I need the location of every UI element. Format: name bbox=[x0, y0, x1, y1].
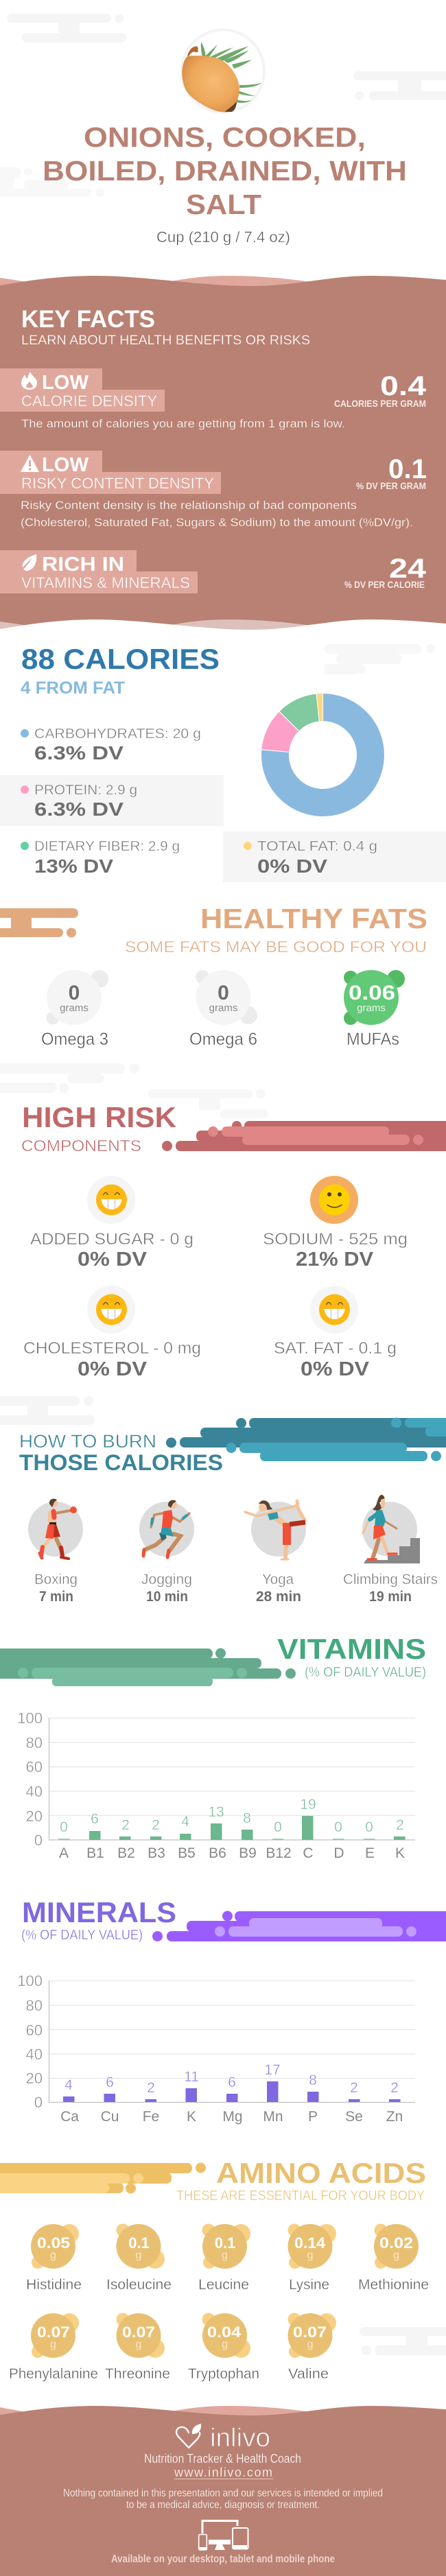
title: SALT bbox=[186, 189, 261, 220]
risk: saturated fat: SAT. FAT - 0.1 g bbox=[274, 1339, 397, 1358]
background cloud: calories bbox=[325, 644, 435, 674]
bar values: 17 bbox=[264, 2062, 281, 2078]
bar values: 2 bbox=[390, 2080, 399, 2096]
bar values: 0 bbox=[334, 1819, 342, 1835]
logo: inlivo: inlivo bbox=[210, 2424, 270, 2453]
icon: runner bbox=[143, 1513, 189, 1557]
fact: calorie density: The amount of calories you are getting from 1 gram is low. bbox=[21, 417, 345, 430]
banner: minerals bbox=[152, 1911, 446, 1941]
amino acid: tryptophan: g bbox=[222, 2339, 228, 2350]
amino acid: valine bbox=[288, 2313, 336, 2382]
x axis labels: P bbox=[308, 2109, 318, 2125]
activity: jogging: 10 min bbox=[146, 1589, 188, 1605]
heading: high risk: HIGH RISK bbox=[22, 1101, 176, 1133]
amino acid: histidine: Histidine bbox=[26, 2277, 82, 2293]
x axis labels: E bbox=[365, 1845, 375, 1861]
bar chart: minerals bbox=[17, 1972, 415, 2125]
icon: leaf bbox=[23, 554, 36, 571]
fact: calorie density: CALORIE DENSITY bbox=[21, 392, 157, 410]
y axis labels: 40 bbox=[26, 1783, 43, 1800]
amino acid: isoleucine: g bbox=[136, 2249, 141, 2261]
donut chart bbox=[261, 693, 384, 816]
bar values: 6 bbox=[91, 1811, 99, 1827]
bar chart: vitamins bbox=[17, 1710, 415, 1861]
fat: mufas: MUFAs bbox=[347, 1030, 399, 1049]
x axis labels: D bbox=[333, 1845, 344, 1861]
legend: protein bbox=[0, 775, 224, 826]
risk: cholesterol: 0% DV bbox=[78, 1358, 148, 1380]
activity: yoga: Yoga bbox=[262, 1572, 294, 1587]
amino acid: threonine: Threonine bbox=[105, 2366, 170, 2382]
serving size: Cup (210 g / 7.4 oz) bbox=[156, 228, 290, 246]
bars bbox=[58, 1816, 405, 1840]
x axis labels: Mn bbox=[263, 2109, 283, 2125]
banner: amino acids bbox=[0, 2162, 206, 2194]
amino acid: methionine: Methionine bbox=[358, 2277, 429, 2293]
fact: calorie density: 0.4 bbox=[380, 371, 427, 401]
x axis labels: B6 bbox=[209, 1845, 226, 1861]
title: ONIONS, COOKED, bbox=[84, 121, 366, 153]
legend: dietary fiber bbox=[21, 839, 180, 877]
heading: healthy fats: HEALTHY FATS bbox=[200, 903, 427, 934]
bar values: 2 bbox=[152, 1817, 160, 1833]
icon: smiling face bbox=[319, 1184, 350, 1216]
bar values bbox=[60, 1797, 404, 1835]
bar values: 2 bbox=[147, 2080, 155, 2096]
amino acid: valine: 0.07 bbox=[293, 2324, 327, 2341]
bar values: 13 bbox=[208, 1804, 224, 1820]
amino acid: threonine bbox=[105, 2313, 170, 2382]
amino acid: lysine: Lysine bbox=[289, 2277, 329, 2293]
legend: total fat bbox=[223, 831, 446, 882]
icon: stairs bbox=[364, 1538, 420, 1563]
icon: yoga pose bbox=[245, 1501, 305, 1559]
bar values: 2 bbox=[121, 1817, 130, 1833]
activity: climbing stairs bbox=[343, 1495, 438, 1605]
amino acid: isoleucine: 0.1 bbox=[128, 2234, 150, 2252]
subheading: minerals: (% OF DAILY VALUE) bbox=[21, 1928, 143, 1943]
legend: dietary fiber: DIETARY FIBER: 2.9 g bbox=[34, 839, 180, 854]
fat: mufas bbox=[344, 970, 405, 1049]
bar values: 6 bbox=[228, 2075, 236, 2090]
amino acid: tryptophan: Tryptophan bbox=[188, 2366, 259, 2382]
x axis labels bbox=[60, 2109, 403, 2125]
risk: sodium: SODIUM - 525 mg bbox=[263, 1230, 408, 1249]
fact: rich in vitamins and minerals bbox=[0, 550, 427, 593]
amino acid: methionine: g bbox=[393, 2249, 399, 2261]
x axis labels: Mg bbox=[222, 2109, 243, 2125]
y axis labels bbox=[17, 1710, 43, 1849]
fat: omega 6 bbox=[189, 970, 257, 1049]
disclaimer bbox=[63, 2488, 383, 2511]
activity: boxing: Boxing bbox=[34, 1572, 78, 1587]
x axis labels: B1 bbox=[86, 1845, 104, 1861]
activity: boxing: 7 min bbox=[39, 1589, 73, 1605]
heading: how to burn those calories: THOSE CALORIES bbox=[19, 1450, 223, 1475]
icon: devices bbox=[199, 2520, 248, 2550]
subheading: LEARN ABOUT HEALTH BENEFITS OR RISKS bbox=[21, 333, 310, 348]
amino acid: leucine: g bbox=[222, 2249, 228, 2261]
amino acid: histidine bbox=[26, 2224, 82, 2293]
fact: risky content density: (Cholesterol, Saturated Fat, Sugars & Sodium) to the amount (%DV/gr). bbox=[21, 516, 413, 529]
fat: omega 3: Omega 3 bbox=[41, 1030, 108, 1049]
fact: calorie density bbox=[0, 368, 427, 430]
legend: dietary fiber: 13% DV bbox=[34, 855, 113, 877]
icon: grinning face bbox=[96, 1294, 127, 1325]
x axis labels bbox=[59, 1845, 405, 1861]
panel: footer bbox=[0, 2406, 446, 2576]
activity: climbing stairs: Climbing Stairs bbox=[343, 1572, 438, 1587]
bar values: 19 bbox=[300, 1797, 316, 1812]
heading: how to burn those calories: HOW TO BURN bbox=[19, 1431, 156, 1452]
fact: risky content density: Risky Content density is the relationship of bad components bbox=[21, 499, 357, 512]
amino acid: methionine bbox=[358, 2224, 429, 2293]
amino acid: leucine bbox=[198, 2224, 250, 2293]
amino acid: lysine: 0.14 bbox=[294, 2234, 326, 2252]
tagline: Nutrition Tracker & Health Coach bbox=[144, 2452, 301, 2466]
x axis labels: B9 bbox=[239, 1845, 257, 1861]
risk: cholesterol: CHOLESTEROL - 0 mg bbox=[23, 1339, 201, 1358]
amino acid: histidine: g bbox=[50, 2249, 56, 2261]
amino acid: isoleucine: Isoleucine bbox=[106, 2277, 172, 2293]
x axis labels: B3 bbox=[148, 1845, 165, 1861]
x axis labels: Zn bbox=[386, 2109, 403, 2125]
fact: risky content density: 0.1 bbox=[388, 454, 427, 484]
fact: calorie density: LOW bbox=[42, 372, 89, 394]
icon: woman climbing bbox=[363, 1512, 397, 1559]
subheading: vitamins: (% OF DAILY VALUE) bbox=[305, 1665, 426, 1680]
amino acid: tryptophan bbox=[188, 2313, 259, 2382]
activity: climbing stairs: 19 min bbox=[369, 1589, 412, 1605]
risk: added sugar: ADDED SUGAR - 0 g bbox=[30, 1230, 193, 1249]
x axis labels: B12 bbox=[266, 1845, 292, 1861]
fact: risky content density: LOW bbox=[42, 454, 89, 476]
y axis labels bbox=[17, 1972, 43, 2111]
y axis labels: 20 bbox=[26, 2070, 43, 2087]
legend: total fat: TOTAL FAT: 0.4 g bbox=[257, 839, 377, 854]
risk: added sugar bbox=[30, 1176, 193, 1271]
y axis labels: 0 bbox=[34, 1832, 43, 1849]
icon: flame bbox=[21, 372, 37, 390]
fact: rich in vitamins and minerals: % DV PER CALORIE bbox=[344, 579, 425, 590]
y axis labels: 80 bbox=[26, 1734, 43, 1751]
bar values: 2 bbox=[396, 1817, 404, 1833]
subheading: healthy fats: SOME FATS MAY BE GOOD FOR YOU bbox=[125, 938, 427, 956]
activity: jogging bbox=[139, 1500, 194, 1605]
fat: omega 6: grams bbox=[209, 1002, 237, 1014]
amino acid: threonine: 0.07 bbox=[122, 2324, 155, 2341]
fact: risky content density: RISKY CONTENT DENSITY bbox=[21, 475, 214, 492]
y axis labels: 40 bbox=[26, 2046, 43, 2063]
legend: protein: PROTEIN: 2.9 g bbox=[34, 783, 137, 798]
amino acid: phenylalanine bbox=[9, 2313, 98, 2382]
amino acid: leucine: Leucine bbox=[198, 2277, 249, 2293]
amino acid: tryptophan: 0.04 bbox=[207, 2324, 242, 2341]
fat: omega 6: Omega 6 bbox=[189, 1030, 257, 1049]
background clouds: high risk bbox=[0, 1063, 268, 1118]
bar values: 6 bbox=[106, 2075, 114, 2090]
risk: sodium bbox=[263, 1176, 408, 1271]
bar values: 11 bbox=[184, 2069, 199, 2085]
legend: carbohydrates: CARBOHYDRATES: 20 g bbox=[34, 726, 201, 742]
heading: vitamins: VITAMINS bbox=[277, 1633, 426, 1665]
icon: warning triangle bbox=[21, 455, 39, 472]
fact: rich in vitamins and minerals: VITAMINS & MINERALS bbox=[21, 574, 190, 591]
website: www.inlivo.com bbox=[174, 2466, 272, 2479]
x axis labels: K bbox=[187, 2109, 196, 2125]
amino acid: valine: Valine bbox=[288, 2366, 329, 2382]
activity: yoga: 28 min bbox=[256, 1589, 301, 1605]
availability note: Available on your desktop, tablet and mobile phone bbox=[111, 2553, 335, 2565]
fat: omega 3: grams bbox=[60, 1002, 89, 1014]
amino acid: histidine: 0.05 bbox=[37, 2234, 70, 2252]
bar values: 0 bbox=[365, 1819, 373, 1835]
activity: jogging: Jogging bbox=[141, 1572, 192, 1587]
risk: saturated fat: 0% DV bbox=[301, 1358, 370, 1380]
x axis labels: K bbox=[395, 1845, 405, 1861]
fat: omega 3: 0 bbox=[69, 982, 80, 1004]
x axis labels: Ca bbox=[60, 2109, 79, 2125]
fat: omega 3 bbox=[41, 970, 108, 1049]
heading: minerals: MINERALS bbox=[22, 1896, 176, 1928]
x axis labels: C bbox=[303, 1845, 314, 1861]
fat: mufas: 0.06 bbox=[349, 982, 395, 1004]
bar values: 2 bbox=[350, 2080, 358, 2096]
panel: key facts bbox=[0, 276, 446, 639]
heading: 88 calories: 88 CALORIES bbox=[21, 643, 220, 675]
food photo: onion bbox=[182, 30, 264, 113]
risk: added sugar: 0% DV bbox=[78, 1249, 148, 1271]
y axis labels: 100 bbox=[17, 1710, 43, 1727]
heading: amino acids: AMINO ACIDS bbox=[216, 2157, 426, 2189]
x axis labels: B2 bbox=[117, 1845, 135, 1861]
title bbox=[43, 121, 407, 220]
fat: mufas: grams bbox=[357, 1002, 386, 1014]
fact: risky content density bbox=[0, 451, 427, 529]
fact: risky content density: % DV PER GRAM bbox=[356, 480, 426, 491]
amino acid: lysine: g bbox=[307, 2249, 313, 2261]
risk: sodium: 21% DV bbox=[296, 1249, 374, 1271]
y axis labels: 0 bbox=[34, 2094, 43, 2111]
fact: rich in vitamins and minerals: 24 bbox=[389, 554, 427, 584]
amino acid: phenylalanine: 0.07 bbox=[37, 2324, 70, 2341]
bar values: 8 bbox=[243, 1810, 251, 1826]
y axis labels: 60 bbox=[26, 1758, 43, 1775]
banner: vitamins bbox=[0, 1648, 296, 1686]
legend: protein: 6.3% DV bbox=[34, 799, 124, 820]
icon: grinning face bbox=[319, 1294, 350, 1325]
y axis labels: 80 bbox=[26, 1997, 43, 2014]
bar values: 8 bbox=[309, 2072, 317, 2088]
amino acid: leucine: 0.1 bbox=[215, 2234, 235, 2252]
x axis labels: Fe bbox=[143, 2109, 159, 2125]
amino acid: methionine: 0.02 bbox=[379, 2234, 413, 2252]
background cloud: amino acids bbox=[360, 2327, 446, 2355]
logo: inlivo bbox=[176, 2424, 270, 2453]
amino acid: phenylalanine: g bbox=[50, 2339, 56, 2350]
heading: key facts: KEY FACTS bbox=[21, 306, 155, 333]
risk: saturated fat bbox=[274, 1286, 397, 1380]
x axis labels: B5 bbox=[178, 1845, 196, 1861]
subheading: amino acids: THESE ARE ESSENTIAL FOR YOUR BODY bbox=[176, 2188, 425, 2203]
legend: carbohydrates: 6.3% DV bbox=[34, 742, 124, 764]
legend: carbohydrates bbox=[21, 726, 201, 764]
x axis labels: A bbox=[59, 1845, 69, 1861]
subheading: 4 from fat: 4 FROM FAT bbox=[21, 678, 125, 698]
banner: burn bbox=[166, 1417, 446, 1461]
amino acid: lysine bbox=[288, 2224, 336, 2293]
y axis labels: 100 bbox=[17, 1972, 43, 1989]
bar values: 0 bbox=[274, 1819, 282, 1835]
disclaimer: Nothing contained in this presentation and our services is intended or implied bbox=[63, 2488, 383, 2499]
background clouds: header bbox=[0, 14, 446, 198]
subheading: components: COMPONENTS bbox=[21, 1137, 141, 1155]
legend: total fat: 0% DV bbox=[257, 855, 327, 877]
title: BOILED, DRAINED, WITH bbox=[43, 155, 407, 187]
activity: boxing bbox=[28, 1499, 83, 1605]
x axis labels: Se bbox=[345, 2109, 363, 2125]
fact: calorie density: CALORIES PER GRAM bbox=[334, 398, 426, 409]
disclaimer: to be a medical advice, diagnosis or treatment. bbox=[126, 2499, 320, 2511]
fact: rich in vitamins and minerals: RICH IN bbox=[42, 554, 124, 576]
amino acid: isoleucine bbox=[106, 2224, 172, 2293]
icon: boxer bbox=[40, 1511, 70, 1559]
activity: yoga bbox=[245, 1500, 306, 1605]
bar values bbox=[64, 2062, 399, 2096]
amino acid: threonine: g bbox=[136, 2339, 141, 2350]
bar values: 4 bbox=[181, 1814, 189, 1830]
fat: omega 6: 0 bbox=[218, 982, 229, 1004]
risk: cholesterol bbox=[23, 1286, 201, 1380]
background cloud: burn bbox=[0, 1396, 95, 1425]
amino acid: phenylalanine: Phenylalanine bbox=[9, 2366, 98, 2382]
bar values: 4 bbox=[64, 2077, 73, 2093]
heading: how to burn those calories bbox=[19, 1431, 223, 1475]
bars bbox=[63, 2081, 401, 2102]
bar values: 0 bbox=[60, 1819, 68, 1835]
banner: high risk bbox=[162, 1121, 446, 1151]
y axis labels: 20 bbox=[26, 1808, 43, 1825]
icon: grinning face bbox=[96, 1184, 127, 1216]
amino acid: valine: g bbox=[307, 2339, 313, 2350]
y axis labels: 60 bbox=[26, 2022, 43, 2039]
banner: healthy fats bbox=[0, 908, 78, 937]
x axis labels: Cu bbox=[101, 2109, 119, 2125]
